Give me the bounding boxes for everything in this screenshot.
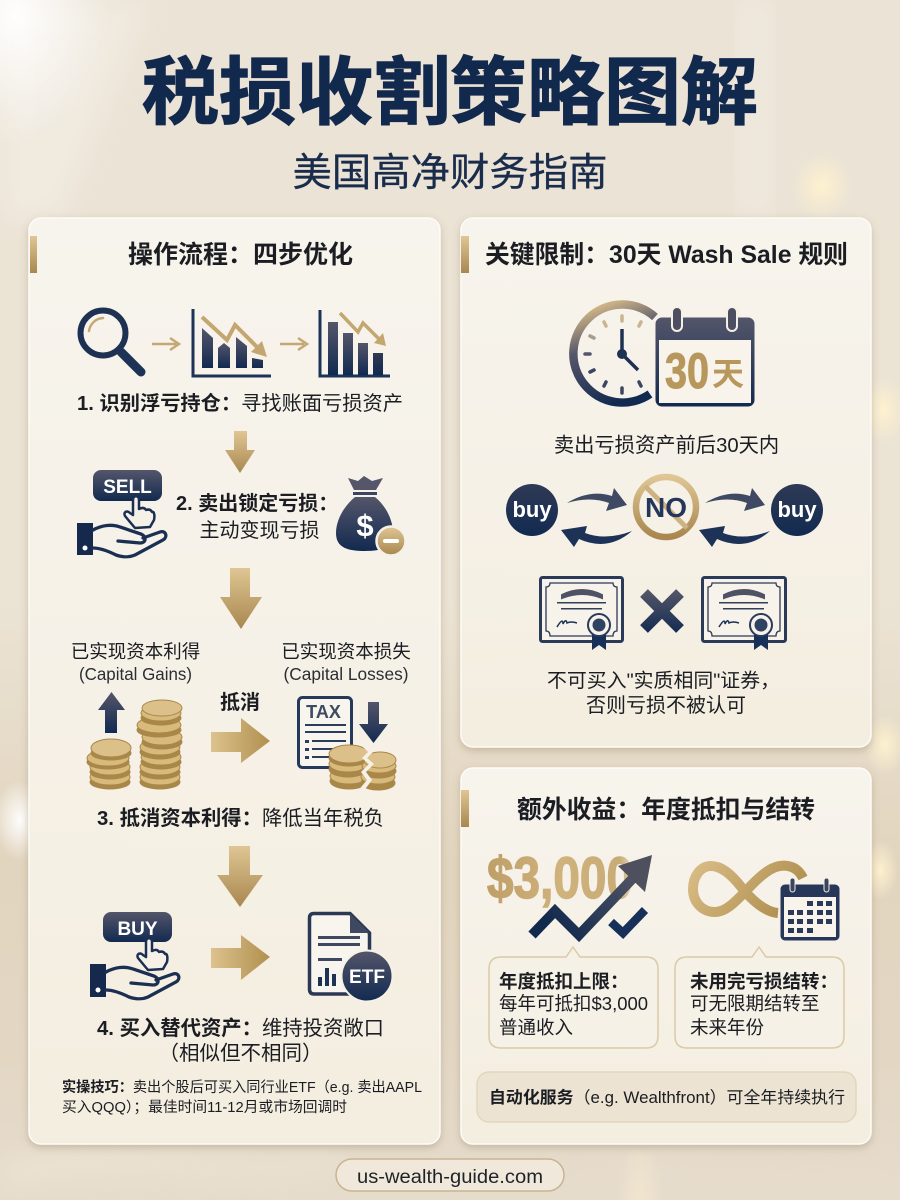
icon: clock: [573, 305, 655, 403]
icon: calendar 30 days: [655, 307, 755, 407]
icon: buy button and hand: BUY: [117, 919, 158, 940]
capital gains label: [71, 641, 200, 684]
panel accent bar: [30, 236, 37, 273]
step 1 text: 1. 识别浮亏持仓：寻找账面亏损资产: [77, 392, 403, 415]
arrow: down 3: [217, 846, 263, 907]
step 4 text: [97, 1017, 384, 1065]
icon: sell button and hand: SELL: [103, 477, 152, 498]
arrows: cycle left: [561, 488, 632, 547]
icon: buy right: buy: [777, 497, 817, 522]
restriction text: [547, 670, 780, 717]
icon: buy right: [771, 484, 823, 536]
arrow: offset right: [211, 718, 270, 763]
icon: buy left: [506, 484, 558, 536]
step 4 text: （相似但不相同）: [158, 1042, 322, 1065]
panel: wash sale rule: [461, 218, 871, 747]
callout: annual deduction: [489, 947, 658, 1048]
icon: calendar 30 days: 天: [712, 356, 744, 392]
panel accent bar: [461, 790, 469, 827]
step 2 text: [176, 491, 338, 542]
icon: up arrow: [98, 692, 125, 733]
icon: infinity with calendar: [693, 866, 840, 941]
icon: certificate left: [540, 578, 622, 650]
icon: broken coins: [329, 745, 396, 792]
title: 税损收割策略图解: [142, 51, 758, 134]
icon: small coin stack: [87, 739, 131, 789]
icon: buy button and hand: [90, 912, 179, 999]
icon: falling bar chart 2: [320, 310, 390, 376]
capital gains label: (Capital Gains): [79, 664, 192, 684]
offset label: 抵消: [220, 691, 260, 714]
practical tip: 买入QQQ）；最佳时间11-12月或市场回调时: [62, 1099, 347, 1116]
practical tip: 实操技巧：卖出个股后可买入同行业ETF（e.g. 卖出AAPL: [62, 1078, 422, 1096]
capital losses label: (Capital Losses): [284, 664, 408, 684]
callout: loss carryforward: 可无限期结转至: [690, 993, 820, 1014]
panel: four step workflow: [29, 218, 440, 1144]
arrow: down 2: [220, 568, 262, 629]
icon: magnifier: [80, 310, 141, 372]
step 2 text: 2. 卖出锁定亏损：: [176, 491, 338, 515]
icon: calendar 30 days: 30: [665, 343, 709, 399]
panel heading: 操作流程：四步优化: [128, 241, 353, 269]
wash sale window text: 卖出亏损资产前后30天内: [554, 434, 779, 457]
capital losses label: 已实现资本损失: [281, 641, 411, 662]
icon: etf document: [310, 914, 392, 1002]
icon: money bag with minus: $: [356, 508, 374, 543]
automation note: 自动化服务（e.g. Wealthfront）可全年持续执行: [489, 1087, 845, 1107]
icon: tax document: TAX: [306, 702, 341, 722]
step 4 text: 4. 买入替代资产：维持投资敞口: [97, 1017, 384, 1040]
footer url pill: [336, 1159, 564, 1191]
capital gains label: 已实现资本利得: [71, 641, 200, 662]
capital losses label: [281, 641, 411, 684]
icon: down arrow: [359, 702, 388, 743]
icon: 3000 with rising arrow: [487, 846, 652, 935]
panel heading: 关键限制：30天 Wash Sale 规则: [485, 241, 848, 269]
callout: annual deduction: 每年可抵扣$3,000: [499, 993, 648, 1014]
callout: loss carryforward: [675, 947, 844, 1048]
icon: certificate right: [702, 578, 786, 650]
arrow: small right 1: [152, 338, 179, 350]
automation note: [477, 1072, 856, 1122]
icon: not equal cross: [644, 593, 680, 629]
callout: loss carryforward: 未来年份: [690, 1017, 764, 1038]
panel heading: 额外收益：年度抵扣与结转: [517, 796, 815, 824]
callout: annual deduction: 年度抵扣上限：: [499, 971, 629, 992]
panel: extra benefits: [461, 768, 871, 1144]
icon: sell button and hand: [77, 470, 166, 557]
step 3 text: 3. 抵消资本利得：降低当年税负: [97, 807, 384, 830]
icon: etf document: ETF: [349, 967, 385, 988]
icon: tax document: [298, 698, 352, 768]
icon: tall coin stack: [137, 700, 182, 789]
subtitle: 美国高净财务指南: [292, 152, 608, 195]
practical tip: [62, 1078, 422, 1116]
icon: no symbol: [636, 477, 696, 537]
icon: 3000 with rising arrow: $3,000: [487, 846, 633, 911]
arrow: replacement right: [211, 935, 270, 980]
callout: annual deduction: 普通收入: [499, 1017, 573, 1038]
restriction text: 否则亏损不被认可: [586, 694, 746, 717]
icon: money bag with minus: [336, 476, 406, 556]
restriction text: 不可买入"实质相同"证券，: [547, 670, 780, 692]
arrow: down 1: [225, 431, 255, 473]
icon: no symbol: NO: [645, 492, 687, 523]
footer url pill: us-wealth-guide.com: [357, 1167, 543, 1188]
arrow: small right 2: [280, 338, 307, 350]
panel accent bar: [461, 236, 469, 273]
icon: buy left: buy: [512, 497, 552, 522]
callout: loss carryforward: 未用完亏损结转：: [690, 971, 838, 992]
step 2 text: 主动变现亏损: [200, 519, 320, 542]
icon: falling bar chart 1: [193, 309, 271, 376]
arrows: cycle right: [699, 488, 770, 547]
